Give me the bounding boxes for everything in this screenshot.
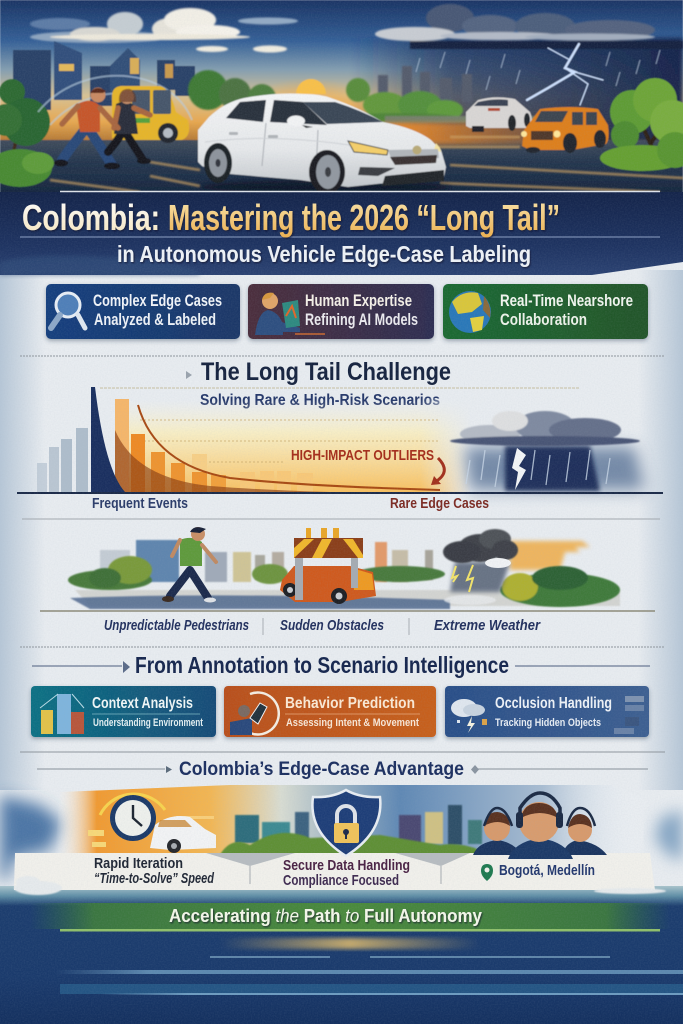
storm cloud with rain xyxy=(450,411,645,491)
icon: headset operators xyxy=(473,793,607,859)
card: context analysis: Understanding Environment xyxy=(93,717,203,729)
caption: locations: Bogotá, Medellín xyxy=(499,863,595,879)
distant white car xyxy=(466,97,532,132)
icon: clock xyxy=(110,795,156,841)
tail fill xyxy=(115,400,470,492)
title band xyxy=(0,192,683,275)
card: nearshore collaboration: Collaboration xyxy=(500,311,587,329)
card: human expertise: Refining AI Models xyxy=(305,311,418,329)
axis baseline xyxy=(17,492,663,494)
clouds: fair weather xyxy=(30,8,298,52)
card: context analysis: Context Analysis xyxy=(92,695,193,712)
scenario illustration xyxy=(40,527,655,611)
city skyline left xyxy=(13,41,195,110)
scenario labels: Unpredictable Pedestrians xyxy=(104,618,249,634)
card: occlusion handling: Tracking Hidden Objects xyxy=(495,717,601,729)
long tail chart xyxy=(17,387,663,512)
orange SUV xyxy=(521,107,609,153)
caption: locations xyxy=(481,863,595,881)
car xyxy=(150,816,216,853)
icon: panels xyxy=(614,696,644,734)
icon: globe xyxy=(449,291,491,333)
caption: secure data: Secure Data Handling xyxy=(283,857,410,874)
storm cloud with lightning xyxy=(443,529,620,607)
scenario labels xyxy=(104,618,541,635)
speed gauge arcs and bars xyxy=(88,794,214,847)
caption: secure data xyxy=(283,857,410,889)
icon: security shield xyxy=(312,790,380,856)
card: nearshore collaboration xyxy=(443,284,648,339)
lightning bolt xyxy=(527,44,603,105)
caption: secure data: Compliance Focused xyxy=(283,872,399,889)
card: complex edge cases xyxy=(46,284,240,339)
bushes xyxy=(68,556,445,590)
city skyline xyxy=(235,805,482,845)
scenario labels: Extreme Weather xyxy=(434,618,541,634)
distant trees and storm city xyxy=(188,66,560,123)
storm overlay xyxy=(350,38,683,142)
section heading: scenario intelligence: From Annotation to Scenario Intelligence xyxy=(135,652,509,678)
paint splatter clouds xyxy=(14,876,666,895)
card: nearshore collaboration: Real-Time Nearshore xyxy=(500,292,633,310)
long tail curve xyxy=(138,405,440,490)
icon: analyst at a screen xyxy=(255,293,325,335)
card: occlusion handling: Occlusion Handling xyxy=(495,695,612,712)
dark shaded curve xyxy=(115,430,330,492)
card: behavior prediction: Behavior Prediction xyxy=(285,695,415,712)
icon: magnifying glass xyxy=(51,293,85,328)
road barrier and van xyxy=(280,528,376,604)
axis label: frequent: Frequent Events xyxy=(92,496,188,512)
skyline xyxy=(100,540,433,582)
caption: rapid iteration: “Time-to-Solve” Speed xyxy=(94,871,215,887)
detection arcs xyxy=(38,76,192,125)
section heading: long tail challenge: The Long Tail Challenge xyxy=(201,358,451,386)
road xyxy=(0,140,683,195)
yellow taxi xyxy=(112,86,189,143)
paper side vignette xyxy=(0,270,683,790)
pedestrians crossing xyxy=(54,88,151,170)
main white car xyxy=(198,94,450,194)
scenario labels: Sudden Obstacles xyxy=(280,618,384,634)
icon: person and phone in ring xyxy=(230,692,279,735)
caption: rapid iteration xyxy=(94,855,215,887)
tree right xyxy=(600,78,683,171)
advantage illustration band xyxy=(55,785,650,858)
caption: rapid iteration: Rapid Iteration xyxy=(94,855,183,872)
card: context analysis xyxy=(31,686,216,737)
grey frequency bars xyxy=(37,428,88,492)
advantage caption band xyxy=(14,853,655,890)
hero illustration: car in changing weather xyxy=(0,0,683,195)
card: complex edge cases: Analyzed & Labeled xyxy=(94,311,216,329)
footer background with road stripes xyxy=(0,886,683,1024)
banner: path to full autonomy xyxy=(30,903,670,932)
card: human expertise: Human Expertise xyxy=(305,292,412,310)
icon: cloud with bolt xyxy=(451,699,487,733)
main title: Colombia: xyxy=(22,197,160,238)
section subtitle: Solving Rare & High-Risk Scenarios xyxy=(200,392,440,409)
main title xyxy=(22,197,560,238)
callout: high-impact outliers xyxy=(291,447,444,485)
section heading: advantage: Colombia’s Edge-Case Advantage xyxy=(179,759,464,780)
callout: high-impact outliers: HIGH-IMPACT OUTLIERS xyxy=(291,447,434,464)
banner: path to full autonomy: Accelerating the Path to Full Autonomy xyxy=(169,905,483,926)
tree left xyxy=(0,79,54,187)
card: behavior prediction: Assessing Intent & Movement xyxy=(286,717,419,729)
main title: Mastering the 2026 “Long Tail” xyxy=(168,197,560,238)
card: complex edge cases: Complex Edge Cases xyxy=(93,292,222,310)
card: behavior prediction xyxy=(224,686,436,737)
storm clouds xyxy=(375,4,683,49)
section heading: advantage xyxy=(37,759,648,780)
rain streaks xyxy=(416,50,660,104)
navy peak xyxy=(91,387,125,492)
sun dial xyxy=(296,79,326,94)
subtitle: in Autonomous Vehicle Edge-Case Labeling xyxy=(117,241,531,267)
icon: city buildings xyxy=(40,694,84,734)
pedestrian walking xyxy=(162,527,216,602)
blue paint edges xyxy=(0,795,683,880)
axis label: rare: Rare Edge Cases xyxy=(390,496,489,512)
orange bars xyxy=(115,399,313,492)
card: occlusion handling xyxy=(445,686,649,737)
card: human expertise xyxy=(248,284,434,339)
